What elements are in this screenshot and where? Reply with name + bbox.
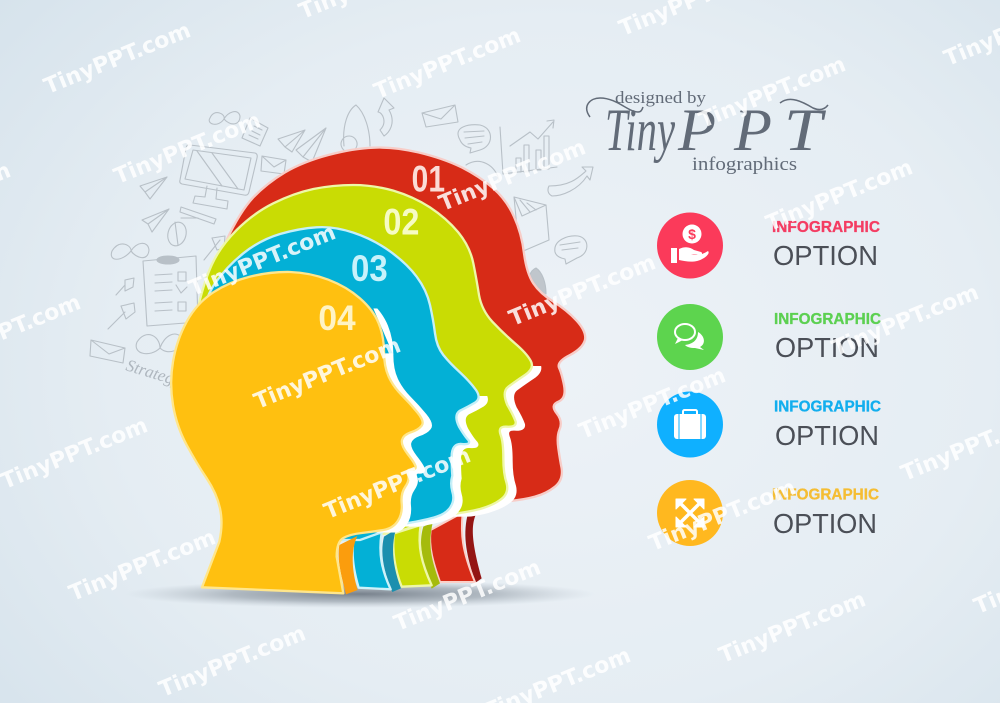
watermarks: TinyPPT.com bbox=[251, 333, 405, 415]
icon: money hand: $ bbox=[688, 226, 696, 242]
doodle: strategy label: Strategy bbox=[124, 356, 184, 391]
icon: expand arrows bbox=[657, 480, 723, 546]
watermarks: TinyPPT.com bbox=[321, 443, 475, 525]
watermarks: TinyPPT.com bbox=[696, 52, 850, 134]
doodle: keyboard bbox=[180, 207, 216, 224]
doodle: note bbox=[242, 118, 268, 146]
watermarks: TinyPPT.com bbox=[186, 220, 340, 302]
doodle: swoosh arrow bbox=[548, 167, 593, 196]
watermarks: TinyPPT.com bbox=[436, 135, 590, 217]
doodle: envelopes bbox=[90, 105, 458, 363]
doodle: chart bbox=[500, 120, 557, 174]
doodle: box bbox=[514, 197, 549, 252]
watermarks: TinyPPT.com bbox=[111, 108, 265, 190]
doodle: push pins bbox=[108, 236, 225, 329]
doodle: clipboard bbox=[143, 256, 198, 326]
watermarks: TinyPPT.com bbox=[0, 413, 152, 495]
head 03: blue bbox=[193, 227, 487, 592]
icon: briefcase bbox=[657, 392, 723, 458]
number 03: 03 bbox=[351, 248, 388, 289]
label: infographic: INFOGRAPHIC bbox=[772, 219, 880, 236]
doodle: mouse bbox=[165, 218, 198, 248]
icon: money hand bbox=[657, 212, 723, 278]
watermarks: TinyPPT.com bbox=[829, 280, 983, 362]
head stack bbox=[171, 148, 585, 596]
logo wordmark: PPT: P bbox=[677, 97, 716, 163]
option 1: red bbox=[657, 212, 880, 278]
number 04: 04 bbox=[318, 299, 356, 338]
doodle: rocket bbox=[341, 105, 370, 152]
doodle: second rocket bbox=[528, 268, 546, 294]
option 4: yellow bbox=[657, 480, 879, 546]
icon: chat bubbles bbox=[657, 304, 723, 370]
watermarks: TinyPPT.com bbox=[391, 555, 545, 637]
number 02: 02 bbox=[383, 201, 419, 242]
label: infographic: INFOGRAPHIC bbox=[772, 486, 879, 504]
doodle: curved arrow up bbox=[378, 98, 394, 136]
logo: designed by TinyPPT infographics bbox=[587, 88, 828, 175]
doodle icons background bbox=[90, 98, 593, 391]
number 01: 01 bbox=[412, 159, 445, 200]
doodle: strategy infinity bbox=[136, 334, 184, 354]
head 01: red bbox=[227, 148, 585, 583]
ground shadow bbox=[125, 580, 595, 608]
watermarks: TinyPPT.com bbox=[506, 250, 660, 332]
label: infographic: INFOGRAPHIC bbox=[774, 311, 881, 328]
logo wordmark: PPT bbox=[677, 97, 826, 163]
logo wordmark: PPT: T bbox=[784, 97, 826, 163]
logo wordmark: Tiny: Tiny bbox=[605, 97, 675, 163]
watermarks: TinyPPT.com bbox=[576, 363, 730, 445]
doodle: speech bubbles bbox=[458, 125, 587, 264]
label: option: OPTION bbox=[773, 508, 877, 539]
doodle: monitor bbox=[180, 145, 257, 209]
label: option: OPTION bbox=[773, 240, 878, 271]
doodle: paper planes bbox=[140, 128, 326, 232]
logo line: infographics: infographics bbox=[692, 155, 797, 175]
head 02: green bbox=[197, 185, 540, 589]
doodle: infinity bbox=[111, 112, 240, 259]
watermarks: TinyPPT.com bbox=[646, 475, 800, 557]
label: infographic: INFOGRAPHIC bbox=[774, 398, 881, 416]
watermarks: TinyPPT.com bbox=[371, 23, 525, 105]
head 04: yellow bbox=[171, 272, 431, 596]
label: option: OPTION bbox=[775, 332, 879, 363]
logo line: designed by: designed by bbox=[615, 88, 707, 107]
watermarks: TinyPPT.com bbox=[763, 155, 917, 237]
option 3: blue bbox=[657, 392, 881, 458]
option 2: green bbox=[657, 304, 881, 370]
watermarks: TinyPPT.com bbox=[41, 18, 195, 100]
watermarks: TinyPPT.com bbox=[716, 587, 870, 669]
doodle: bulb arc bbox=[466, 161, 499, 180]
logo wordmark: PPT: P bbox=[733, 97, 772, 163]
watermarks: TinyPPT.com bbox=[66, 525, 220, 607]
watermarks: TinyPPT.com bbox=[156, 621, 310, 703]
logo swash strokes bbox=[587, 98, 828, 117]
label: option: OPTION bbox=[775, 420, 879, 451]
